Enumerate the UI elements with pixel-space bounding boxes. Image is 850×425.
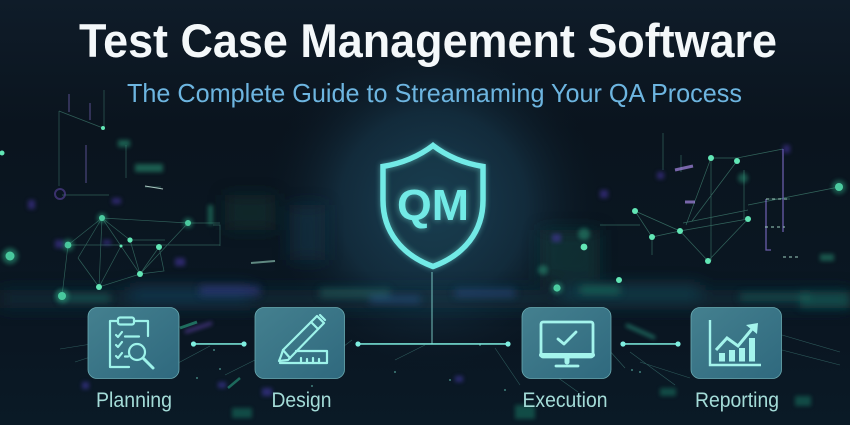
icon: clipboard with magnifier: [110, 318, 153, 368]
label: planning: Planning: [96, 389, 172, 412]
icon: QM shield: [383, 146, 483, 266]
right data network: [538, 133, 846, 294]
label: reporting: Reporting: [695, 389, 779, 412]
label: design: Design: [272, 389, 332, 412]
panel: reporting: [691, 308, 782, 378]
label: execution: Execution: [522, 389, 608, 412]
icon: monitor with check: [541, 322, 593, 366]
panel: planning: [88, 308, 179, 378]
panel: design: [255, 308, 344, 378]
icon: QM shield: QM: [397, 181, 469, 230]
connector: design to execution: [355, 341, 511, 347]
left data network: [0, 90, 275, 303]
panel: execution: [522, 308, 611, 378]
connector: shield to workflow: [431, 272, 433, 344]
connector: execution to reporting: [620, 341, 681, 347]
icon: bar chart with arrow: [710, 320, 761, 365]
subtitle: The Complete Guide to Streamaming Your QA Process: [127, 78, 742, 108]
connector: planning to design: [191, 341, 247, 347]
title: Test Case Management Software: [79, 14, 777, 67]
floor streaks: [60, 322, 840, 419]
icon: pencil and ruler: [279, 315, 327, 363]
